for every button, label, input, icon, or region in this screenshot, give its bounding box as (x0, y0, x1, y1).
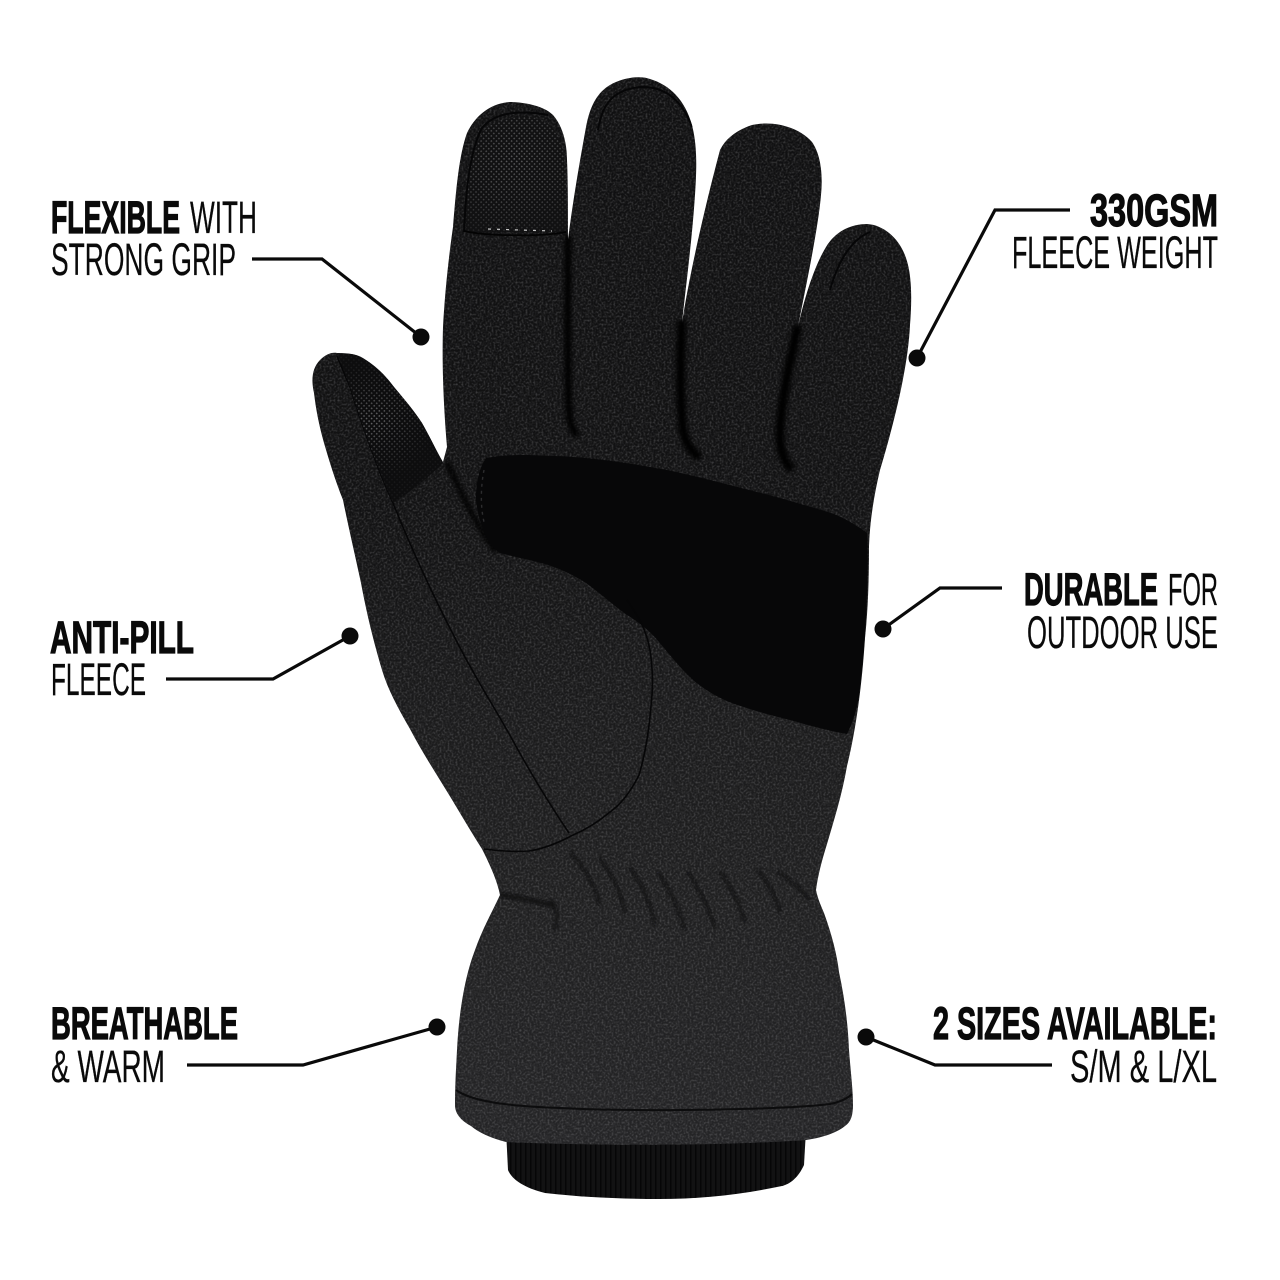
leader line (917, 210, 1070, 358)
callout text: FLEECE (51, 654, 146, 705)
callout text (1012, 185, 1218, 278)
leader line (166, 636, 350, 679)
callout text: WITH (190, 192, 257, 243)
callout text: & WARM (51, 1041, 165, 1092)
callout text (933, 998, 1217, 1092)
glove fleece body (300, 70, 920, 1150)
callout text: ANTI-PILL (50, 612, 194, 663)
finger valley shadows (447, 235, 798, 552)
callout text: FLEXIBLE (51, 192, 180, 243)
glove product image (300, 70, 920, 1199)
index finger leather touch tip (464, 117, 567, 235)
callout text: FOR (1168, 564, 1218, 615)
callout text (51, 192, 257, 285)
callout text: DURABLE (1024, 564, 1158, 615)
callout: anti-pill fleece (50, 612, 358, 705)
white stitching (488, 229, 552, 231)
callout text: STRONG GRIP (51, 234, 236, 285)
palm suede patch (476, 455, 868, 734)
thumb and palm seam (337, 356, 652, 851)
callout text (50, 612, 194, 705)
leader dot (858, 1028, 874, 1046)
callout: 330gsm fleece weight (908, 185, 1218, 366)
callout: durable for outdoor use (874, 564, 1218, 658)
leader line (187, 1027, 437, 1065)
elastic wrist gathers (500, 852, 810, 930)
thumb leather grain (338, 354, 443, 503)
tip seam line (464, 231, 566, 235)
thumb leather touch tip (338, 354, 443, 503)
callout: 2 sizes available (858, 998, 1217, 1092)
leader dot (412, 328, 430, 346)
leader dot (874, 620, 892, 638)
cuff fold seam (456, 1090, 852, 1110)
patch stitching (481, 470, 484, 522)
leader line (866, 1037, 1052, 1065)
leader dot (342, 628, 358, 644)
callout text: 330GSM (1090, 185, 1218, 236)
leader line (883, 588, 1002, 629)
leader line (252, 259, 421, 337)
callout: flexible with strong grip (51, 192, 430, 346)
leader dot (908, 350, 926, 366)
leader dot (428, 1018, 446, 1036)
callout: breathable and warm (51, 998, 446, 1092)
index leather grain (466, 117, 567, 232)
callout text: BREATHABLE (51, 998, 238, 1049)
knit ribbed inner cuff (506, 1130, 806, 1199)
fingertip seams (464, 87, 870, 290)
callout text (51, 998, 238, 1092)
callout text (1024, 564, 1218, 658)
